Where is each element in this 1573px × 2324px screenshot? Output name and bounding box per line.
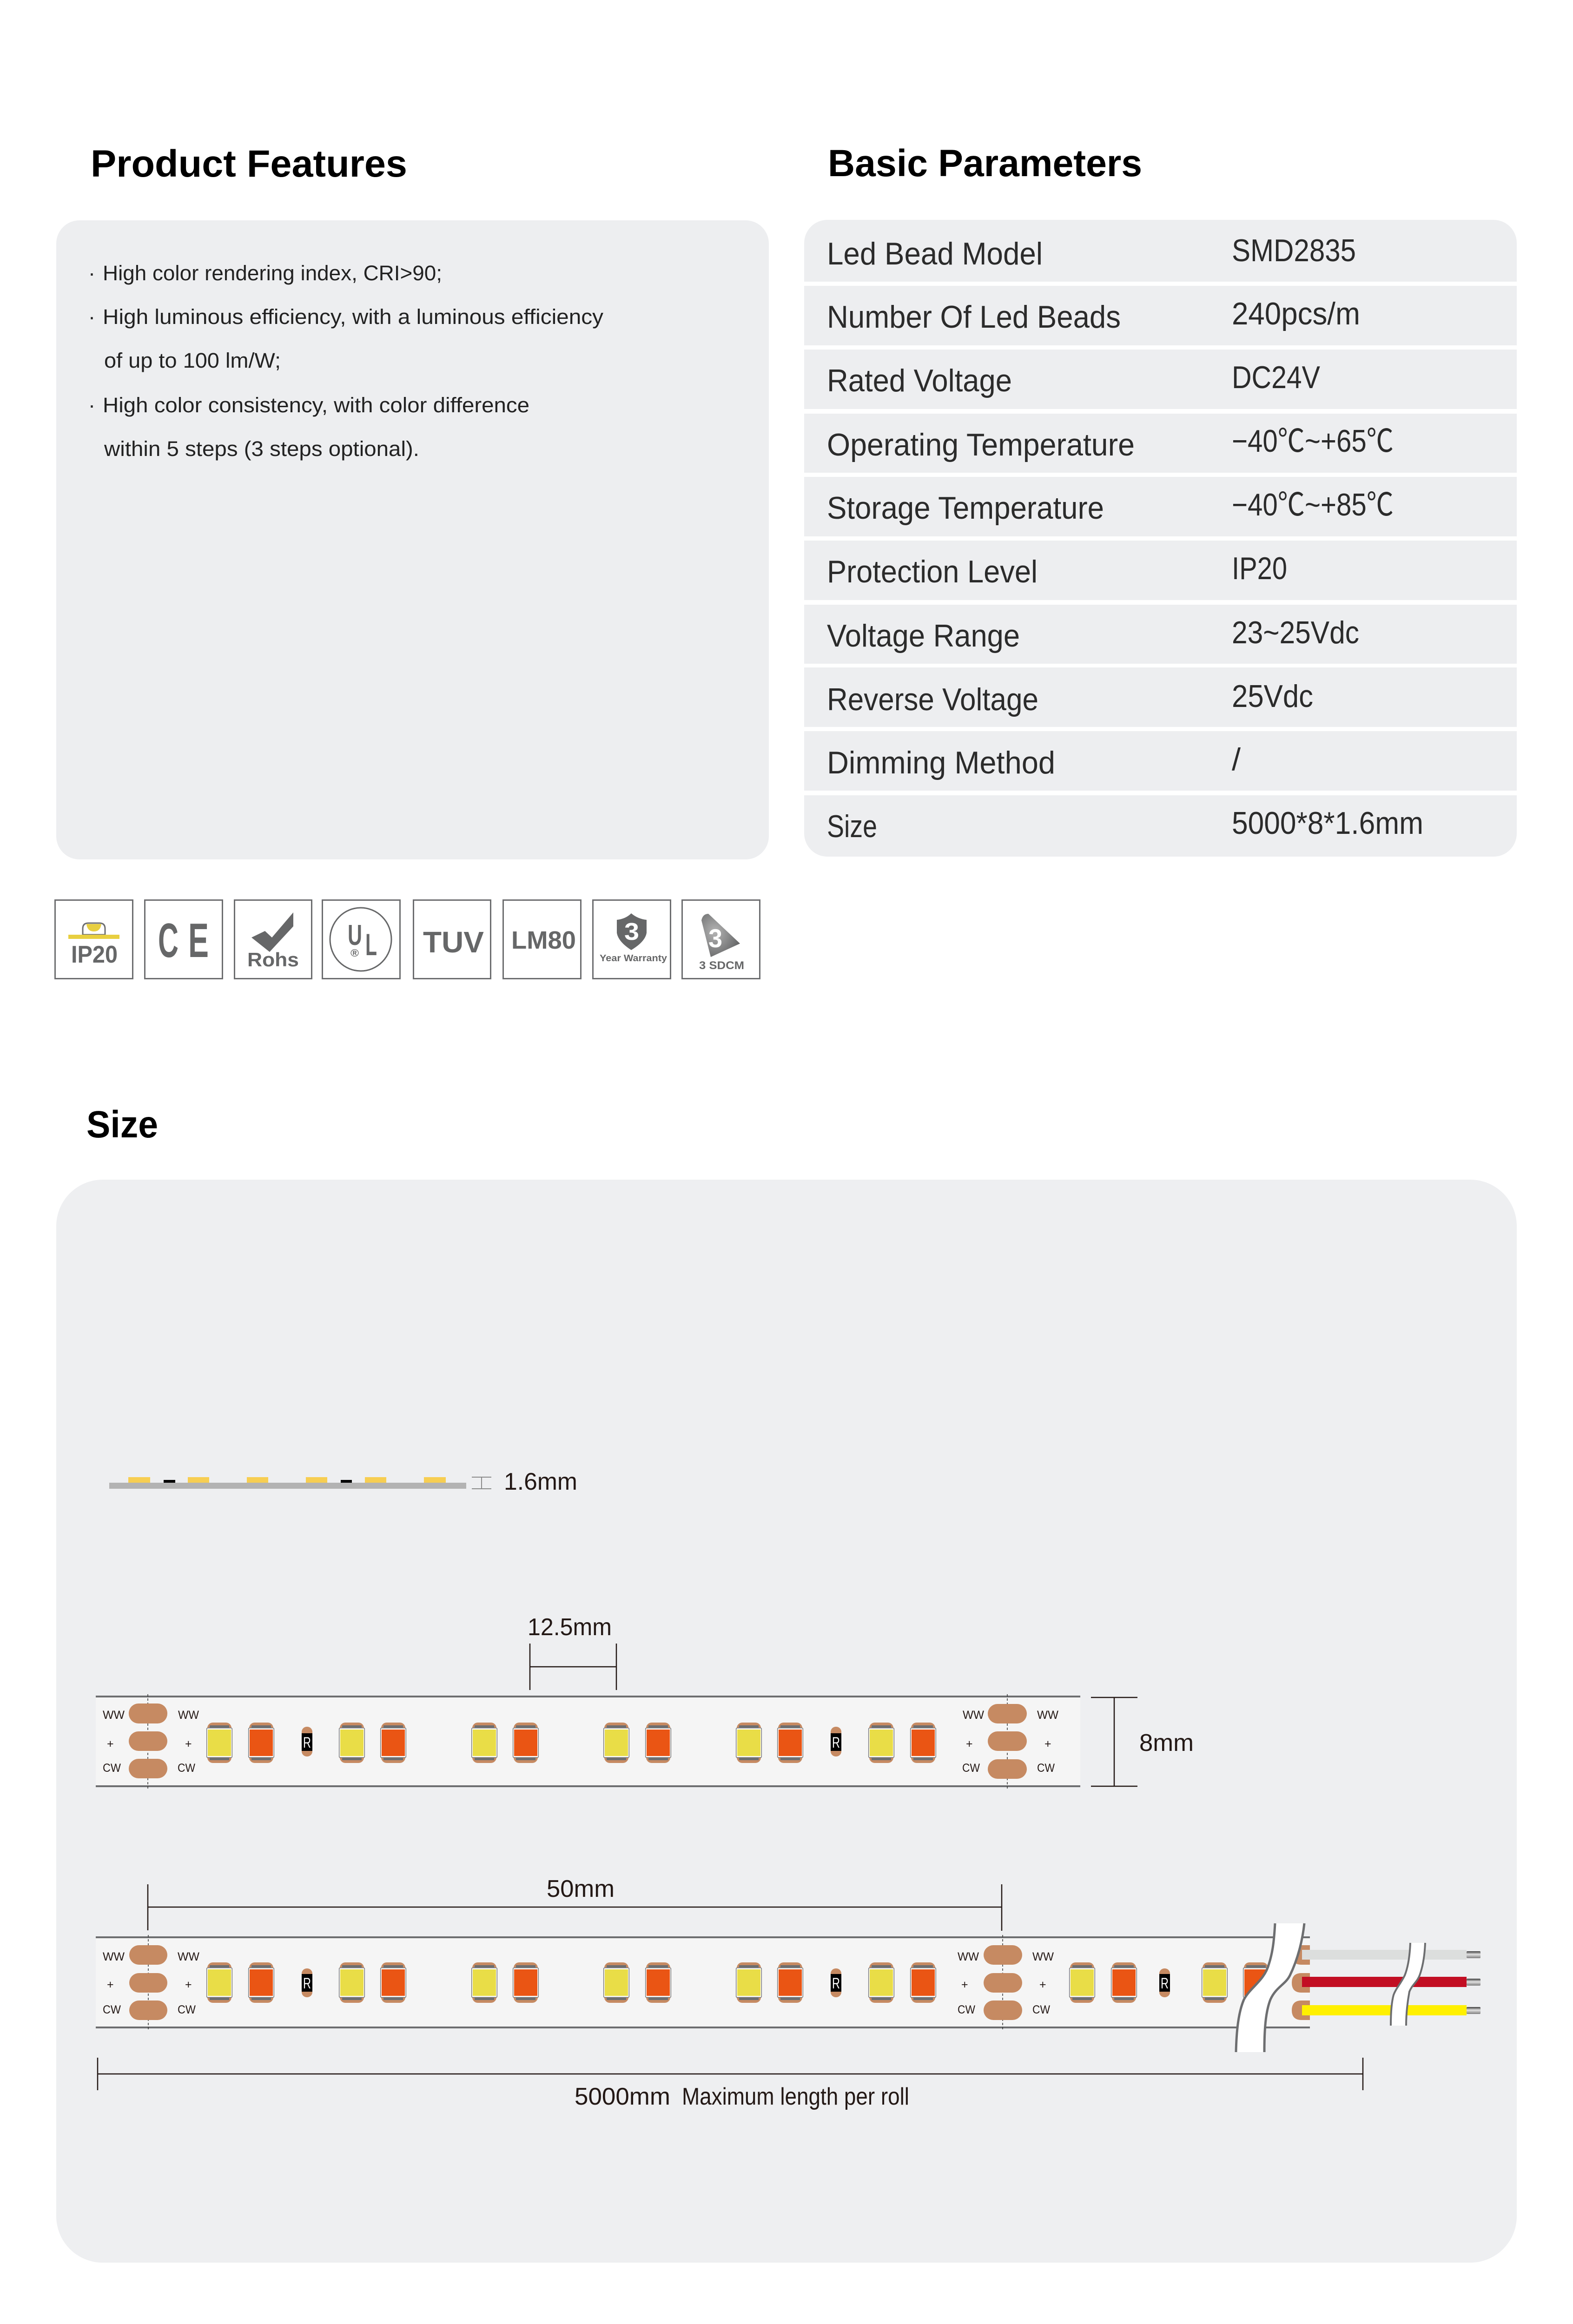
- side profile of strip: [109, 1477, 466, 1489]
- resistors: R: [832, 1734, 840, 1751]
- row: Storage Temperature: −40℃~+85℃: [1232, 487, 1394, 522]
- dimension: 5000mm: [98, 2058, 1363, 2110]
- LED strip 2 with wires: [96, 1923, 1480, 2052]
- dimension: 5000mm: Maximum length per roll: [682, 2083, 909, 2110]
- icon: IP20: [55, 900, 133, 979]
- row: Dimming Method: [827, 742, 1241, 780]
- icon: 3 year warranty shield: [593, 900, 670, 979]
- icon: UL: [323, 900, 400, 979]
- solder pads left: [129, 1703, 167, 1778]
- panel: size drawings: [56, 1180, 1517, 2263]
- pad labels: CW: [1032, 2003, 1050, 2016]
- pad labels: +: [1039, 1978, 1046, 1991]
- heading: Size: Size: [86, 1103, 158, 1146]
- pad labels right: CW: [1037, 1762, 1055, 1775]
- row: Storage Temperature: [827, 487, 1394, 526]
- pad labels: WW: [103, 1950, 125, 1963]
- wires: [1302, 1950, 1480, 2015]
- row: Number Of Led Beads: Number Of Led Beads: [827, 299, 1121, 335]
- resistors: [302, 1727, 841, 1756]
- row: Protection Level: [827, 551, 1287, 589]
- row: Protection Level: IP20: [1232, 551, 1287, 586]
- feature list text: ·: [88, 305, 95, 329]
- row: Reverse Voltage: Reverse Voltage: [827, 682, 1038, 717]
- pad labels right: +: [966, 1737, 973, 1750]
- LED row: [207, 1723, 936, 1763]
- icon: Rohs: Rohs: [247, 949, 299, 971]
- icon: TUV: [414, 900, 491, 979]
- LED strip 1: [96, 1694, 1080, 1789]
- icon: 3 SDCM: 3 SDCM: [699, 959, 744, 972]
- feature list text: ·: [88, 261, 95, 285]
- dimension: 12.5mm: 12.5mm: [528, 1614, 612, 1641]
- row: Dimming Method: /: [1232, 742, 1241, 777]
- row: Size: 5000*8*1.6mm: [1232, 805, 1423, 841]
- pad labels: WW: [1032, 1950, 1054, 1963]
- icon: IP20: IP20: [71, 941, 118, 968]
- icon: UL: U: [348, 919, 362, 951]
- row: Voltage Range: Voltage Range: [827, 618, 1020, 654]
- row: Led Bead Model: [827, 233, 1356, 271]
- icon: 3 SDCM: 3: [708, 924, 722, 953]
- end pads: [1292, 1945, 1310, 2020]
- row: Led Bead Model: Led Bead Model: [827, 236, 1043, 271]
- row: Rated Voltage: Rated Voltage: [827, 363, 1012, 398]
- pad labels: CW: [178, 2003, 196, 2016]
- icon: 3 SDCM: [682, 900, 760, 979]
- icon: 3 year warranty shield: Year Warranty: [600, 953, 668, 964]
- icon: CE: C: [158, 914, 178, 968]
- icon: LM80: LM80: [511, 926, 576, 954]
- row: Storage Temperature: Storage Temperature: [827, 490, 1104, 526]
- resistors: [302, 1968, 1170, 1997]
- icon: LM80: [503, 900, 581, 979]
- dimension: 5000mm: 5000mm: [575, 2083, 670, 2110]
- icon: CE: E: [188, 914, 209, 968]
- solder pads right: [988, 1704, 1027, 1779]
- row: Protection Level: Protection Level: [827, 554, 1038, 589]
- pad labels: +: [961, 1978, 968, 1991]
- row: Reverse Voltage: [827, 679, 1313, 717]
- row: Rated Voltage: DC24V: [1232, 360, 1321, 395]
- icon: CE: [145, 900, 222, 979]
- resistors: R: [832, 1975, 840, 1992]
- pad labels: WW: [178, 1950, 199, 1963]
- feature list text: [88, 261, 604, 461]
- heading: Basic Parameters: Basic Parameters: [828, 142, 1142, 185]
- icon: 3 year warranty shield: 3: [624, 918, 639, 945]
- heading: Product Features: Product Features: [91, 143, 407, 185]
- dimension: 8mm: 8mm: [1139, 1730, 1194, 1756]
- dimension: 8mm: [1091, 1697, 1194, 1786]
- row: Size: Size: [827, 809, 877, 844]
- row: Operating Temperature: Operating Temperature: [827, 427, 1135, 462]
- pad labels right: +: [1044, 1737, 1051, 1750]
- pad labels right: WW: [1037, 1709, 1058, 1722]
- feature list text: of up to 100 lm/W;: [104, 349, 281, 372]
- row: Voltage Range: 23~25Vdc: [1232, 615, 1359, 650]
- feature list text: High color rendering index, CRI>90;: [103, 261, 442, 285]
- pad labels right: CW: [962, 1762, 980, 1775]
- solder pads: [129, 1945, 1022, 2020]
- pad labels: +: [185, 1978, 192, 1991]
- row: Size: [827, 805, 1423, 844]
- icon: UL: L: [365, 927, 377, 962]
- feature list text: High luminous efficiency, with a luminous efficiency: [103, 305, 604, 329]
- pad labels: WW: [958, 1950, 979, 1963]
- row: Led Bead Model: SMD2835: [1232, 233, 1356, 268]
- row: Reverse Voltage: 25Vdc: [1232, 679, 1313, 714]
- feature list text: ·: [88, 393, 95, 417]
- strip break mark: [1236, 1923, 1304, 2052]
- pad labels right: [962, 1709, 1058, 1775]
- icon: TUV: TUV: [423, 925, 484, 959]
- row: Operating Temperature: −40℃~+65℃: [1232, 423, 1394, 459]
- icon: Rohs: [234, 900, 311, 979]
- pad labels left: WW: [178, 1709, 199, 1722]
- feature list text: High color consistency, with color difference: [103, 393, 529, 417]
- dimension: 1.6mm: 1.6mm: [504, 1468, 577, 1495]
- row: Rated Voltage: [827, 360, 1321, 398]
- pad labels: CW: [958, 2003, 975, 2016]
- resistors: R: [303, 1734, 311, 1751]
- resistors: R: [1161, 1975, 1169, 1992]
- dimension: 50mm: [148, 1875, 1002, 1931]
- icon: UL: ®: [350, 947, 359, 959]
- panel: product features: [56, 220, 769, 859]
- dimension: 12.5mm: [528, 1614, 616, 1690]
- wire break mark: [1391, 1943, 1425, 2026]
- pad labels left: CW: [103, 1762, 121, 1775]
- row: Number Of Led Beads: 240pcs/m: [1232, 296, 1360, 331]
- dimension: 1.6mm: [472, 1468, 577, 1495]
- row: Dimming Method: Dimming Method: [827, 745, 1055, 780]
- row: Number Of Led Beads: [827, 296, 1360, 335]
- pad labels: [103, 1950, 1054, 2016]
- dimension: 50mm: 50mm: [547, 1875, 615, 1902]
- certification icons row: [55, 900, 760, 979]
- pad labels: +: [107, 1978, 114, 1991]
- feature list text: within 5 steps (3 steps optional).: [104, 437, 419, 461]
- panel: basic parameters table: [804, 220, 1517, 857]
- pad labels left: CW: [178, 1762, 195, 1775]
- LED row: [207, 1962, 1269, 2003]
- pad labels left: [103, 1709, 199, 1775]
- pad labels right: WW: [963, 1709, 984, 1722]
- row: Voltage Range: [827, 615, 1359, 654]
- pad labels: CW: [103, 2003, 121, 2016]
- pad labels left: +: [185, 1737, 192, 1750]
- row: Operating Temperature: [827, 423, 1394, 462]
- pad labels left: WW: [103, 1709, 125, 1722]
- pad labels left: +: [107, 1737, 114, 1750]
- resistors: R: [303, 1975, 311, 1992]
